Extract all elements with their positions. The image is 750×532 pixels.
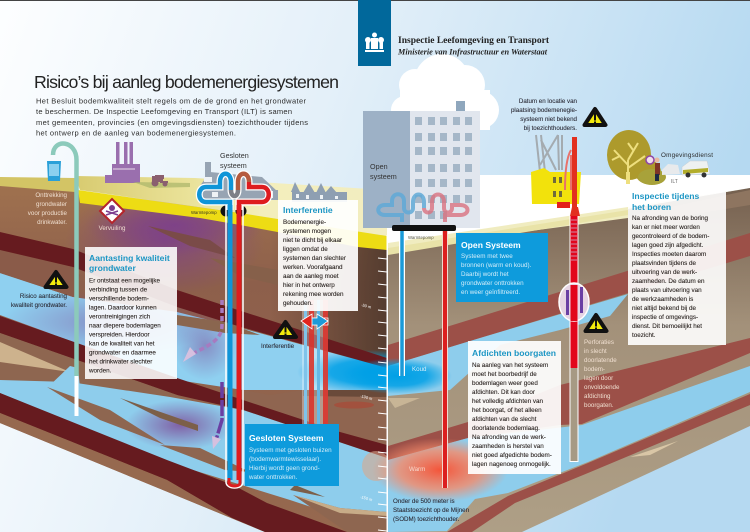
icon: pollution diamond — [100, 199, 124, 223]
panel: inspectie tijdens het boren: lagen goed zijn afgedicht. — [632, 242, 704, 249]
warning: datum en locatie — [584, 109, 606, 125]
interference arrows — [301, 314, 328, 329]
panel: interferentie: systemen mogen — [283, 228, 331, 235]
drilled well column — [570, 216, 578, 462]
brown under water — [243, 390, 387, 445]
panel: interferentie — [278, 200, 358, 311]
panel: gesloten systeem — [245, 424, 339, 486]
perforation detail — [559, 283, 589, 321]
depth labels: -50 m — [361, 302, 373, 310]
panel: aantasting kwaliteit grondwater: worden. — [88, 368, 112, 374]
panel: afdichten boorgaten: het boorgat, of het alleen — [472, 407, 542, 414]
panel: gesloten systeem: Gesloten Systeem — [249, 433, 324, 443]
panel: afdichten boorgaten: bodemlagen weer goed — [472, 380, 538, 387]
panel: inspectie tijdens het boren: niet altijd bekend bij de — [632, 305, 697, 312]
icon: tree — [607, 130, 666, 185]
icon: water glass — [47, 161, 61, 181]
water layer one — [388, 294, 628, 396]
panel: aantasting kwaliteit grondwater: Aantasting kwaliteit — [89, 253, 170, 263]
corner scale — [378, 235, 388, 532]
label: datum en locatie: Datum en locatie van — [519, 98, 578, 105]
panel: afdichten boorgaten: het volledig afdichten van — [472, 398, 544, 405]
heat pump bar — [392, 225, 456, 231]
panel: interferentie: werken. Voorafgaand — [282, 264, 343, 271]
label: datum en locatie: plaatsing bodemenegie- — [511, 107, 577, 114]
organisation name: Inspectie Leefomgeving en Transport — [398, 35, 550, 45]
label: perforaties: onvoldoende — [584, 384, 620, 391]
label: sodm note: Onder de 500 meter is — [393, 498, 455, 505]
icon: inspector with magnifier — [646, 156, 660, 181]
panel: aantasting kwaliteit grondwater: verontreinigingen zich — [89, 314, 151, 320]
panel: aantasting kwaliteit grondwater: lagen. Daardoor kunnen — [89, 304, 157, 312]
maroon band two — [0, 316, 387, 458]
panel: inspectie tijdens het boren — [628, 191, 726, 345]
icon: tractor — [152, 175, 168, 186]
panel: open systeem — [456, 233, 548, 302]
label: datum en locatie: bij toezichthouders. — [524, 125, 577, 132]
label: warmtepomp open: Warmtepomp — [408, 235, 434, 240]
label: ilt: ILT — [671, 179, 678, 185]
icon: house — [197, 162, 278, 200]
intro text: te beschermen. De Inspectie Leefomgeving en Transport (ILT) is samen — [36, 107, 292, 116]
icon: neighbouring houses — [291, 182, 347, 202]
surface field — [75, 176, 387, 236]
dark upper right soil — [270, 225, 387, 360]
label: sodm note: Staatstoezicht op de Mijnen — [393, 507, 470, 514]
panel: aantasting kwaliteit grondwater: naar diepere bodemlagen — [89, 322, 161, 330]
panel: interferentie: Interferentie — [283, 205, 333, 215]
upper water layer — [0, 273, 387, 390]
field — [133, 182, 190, 188]
panel: inspectie tijdens het boren: Inspectie tijdens — [632, 191, 700, 201]
panel: inspectie tijdens het boren: plaats van uitvoering van — [632, 287, 702, 294]
label: perforaties: afdichting — [584, 393, 611, 400]
right soil block — [342, 188, 750, 532]
organisation name: Ministerie van Infrastructuur en Waterstaat — [397, 48, 548, 56]
panel: afdichten boorgaten: zaamheden is herstel van — [472, 443, 544, 450]
label: gesloten systeem: Gesloten — [220, 151, 249, 160]
red layer one — [388, 233, 750, 366]
label: warm: Warm — [409, 466, 425, 473]
panel: inspectie tijdens het boren: inspectie of omgevings- — [632, 314, 698, 321]
panel: open systeem: Systeem met twee — [461, 253, 513, 260]
depth labels: -150 m — [360, 494, 374, 502]
panel: aantasting kwaliteit grondwater: verschillende bodem- — [89, 296, 149, 302]
olive left band — [0, 177, 75, 192]
office building — [363, 101, 480, 228]
panel: interferentie: systemen dan slechter — [283, 255, 346, 262]
panel: afdichten boorgaten: Afdichten boorgaten — [472, 348, 556, 358]
panel: afdichten boorgaten: afdichten van de slecht — [472, 416, 537, 423]
panel: inspectie tijdens het boren: toezicht. — [632, 332, 656, 339]
water layer two — [388, 366, 750, 532]
warning: perforaties — [586, 315, 606, 331]
yellow layer — [78, 190, 387, 250]
lower maroon — [0, 393, 347, 532]
panel: open systeem: grondwater onttrokken — [461, 280, 524, 287]
label: perforaties: in slecht — [584, 348, 607, 355]
panel: gesloten systeem: Systeem met gesloten buizen — [249, 447, 332, 454]
panel: inspectie tijdens het boren: plaatsvinden tijdens de — [632, 260, 697, 267]
label: perforaties: bodem- — [584, 366, 605, 373]
panel: interferentie: rekening mee worden — [283, 291, 344, 298]
panel: open systeem: en weer geïnfiltreerd. — [461, 289, 520, 296]
mid brown and tan — [0, 333, 255, 430]
depth labels — [360, 302, 374, 502]
panel: afdichten boorgaten: doorlatende bodemlaag. — [472, 425, 540, 432]
label: warmtepomp closed: Warmtepomp — [191, 210, 217, 215]
label: vervuiling: Vervuiling — [99, 225, 126, 232]
maroon band one — [0, 232, 387, 368]
panel: inspectie tijdens het boren: zaamheden. De datum en — [632, 278, 705, 285]
intro text: met gemeenten, provincies (en omgevingsdiensten) toezichthouder tijdens — [36, 118, 308, 127]
icon: factory — [105, 142, 140, 183]
label: interferentie: Interferentie — [261, 343, 295, 350]
label: gesloten systeem: systeem — [220, 161, 247, 170]
panel: inspectie tijdens het boren: gecontroleerd of de bodem- — [632, 233, 709, 240]
ground surface white — [387, 175, 750, 250]
panel: afdichten boorgaten: lagen nagenoeg onmogelijk. — [472, 461, 551, 468]
red layer three — [447, 394, 750, 532]
title: Risico’s bij aanleg bodemenergiesystemen — [34, 72, 339, 92]
label: perforaties: doorlatende — [584, 357, 617, 364]
panel: open systeem: Daarbij wordt het — [461, 271, 509, 278]
panel: afdichten boorgaten: Na aanleg van het systeem — [472, 362, 548, 369]
panel: inspectie tijdens het boren: Inspecties moeten daarom — [632, 251, 706, 258]
panel: afdichten boorgaten: moet het boorbedrijf de — [472, 371, 537, 378]
panel: aantasting kwaliteit grondwater: grondwater — [89, 263, 136, 273]
panel: afdichten boorgaten: Na afronding van de werk- — [472, 434, 546, 441]
panel: inspectie tijdens het boren: kan er niet meer worden — [632, 224, 700, 231]
icon: inspection vans — [662, 161, 710, 178]
panel: inspectie tijdens het boren: uitvoering van de werk- — [632, 269, 697, 276]
crest — [365, 32, 384, 52]
panel: aantasting kwaliteit grondwater: grondwater en daarmee — [89, 350, 156, 356]
panel: aantasting kwaliteit grondwater: Er ontstaat een mogelijke — [89, 278, 161, 284]
label: open systeem: Open — [370, 162, 388, 171]
panel: interferentie: aan de aanleg moet — [283, 273, 339, 280]
label: perforaties: lagen door — [584, 375, 613, 382]
label: perforaties: boorgaten. — [584, 402, 614, 409]
panel: inspectie tijdens het boren: het boren — [632, 202, 671, 212]
intro text: Het Besluit bodemkwaliteit stelt regels om de de grond en het grondwater — [36, 96, 307, 106]
warning: interferentie — [275, 322, 296, 337]
drinking water well pipe — [53, 144, 76, 416]
closed system pipes — [199, 174, 269, 488]
panel: aantasting kwaliteit grondwater: het drinkwater slechter — [89, 358, 152, 366]
cream surface edge — [388, 188, 750, 250]
label: open systeem: systeem — [370, 172, 397, 181]
open system pipes — [378, 194, 468, 488]
panel: afdichten boorgaten: afdichten. Dit kan door — [472, 389, 535, 396]
purple contamination arrows — [183, 300, 222, 449]
panel: inspectie tijdens het boren: Na afronding van de boring — [632, 215, 708, 222]
label: onttrekking: voor productie — [28, 210, 68, 217]
label: onttrekking: drinkwater. — [37, 219, 67, 226]
organisation name — [397, 35, 550, 56]
panel: interferentie: Bodemenergie- — [283, 219, 326, 226]
panel: afdichten boorgaten: niet goed afgedichte bodem- — [472, 452, 552, 459]
purple contamination — [65, 185, 265, 295]
label: risico: Risico aantasting — [20, 293, 68, 300]
panel: afdichten boorgaten — [468, 341, 561, 474]
panel: aantasting kwaliteit grondwater — [85, 247, 177, 379]
depth labels: -100 m — [360, 393, 374, 401]
intro text: het ontwerp en de aanleg van bodemenergiesystemen. — [36, 128, 236, 138]
panel: interferentie: gehouden. — [283, 300, 313, 307]
label: koud: Koud — [412, 366, 427, 373]
heat pump — [220, 206, 246, 216]
panel: aantasting kwaliteit grondwater: verbinding tussen de — [89, 286, 148, 294]
brown strata — [148, 226, 235, 258]
label: onttrekking: Onttrekking — [35, 192, 68, 199]
label: perforaties: Perforaties — [584, 339, 614, 346]
panel: interferentie: hier in het ontwerp — [283, 282, 335, 289]
panel: inspectie tijdens het boren: dienst. Dit bemoeilijkt het — [632, 323, 702, 330]
panel: open systeem: bronnen (warm en koud). — [461, 262, 532, 269]
panel: aantasting kwaliteit grondwater: kan de kwaliteit van het — [89, 340, 155, 348]
label: omgevingsdienst: Omgevingsdienst — [661, 152, 713, 159]
cloud — [391, 54, 499, 130]
panel: interferentie: liggen omdat de — [283, 246, 328, 253]
label: risico: kwaliteit grondwater. — [11, 302, 67, 309]
label: datum en locatie: systeem niet bekend — [520, 116, 578, 123]
panel: open systeem: Open Systeem — [461, 240, 521, 250]
interference pipes — [302, 300, 328, 425]
panel: gesloten systeem: (bodemwarmtewisselaar). — [249, 456, 321, 463]
warning: grondwater — [46, 272, 66, 287]
red layer two — [388, 338, 750, 460]
panel: aantasting kwaliteit grondwater: verspreiden. Hierdoor — [89, 332, 150, 338]
logo — [358, 0, 391, 66]
lower water layer — [0, 380, 387, 532]
panel: inspectie tijdens het boren: de werkzaamheden is — [632, 296, 693, 303]
panel: interferentie: niet te dicht bij elkaar — [283, 237, 342, 244]
left soil block — [0, 176, 447, 532]
label: sodm note: (SODM) toezichthouder. — [393, 516, 460, 523]
panel: gesloten systeem: water onttrokken. — [248, 474, 298, 481]
panel: gesloten systeem: Hierbij wordt geen grond- — [249, 465, 320, 472]
label: onttrekking: grondwater — [36, 201, 67, 208]
icon: drilling rig and yellow building — [531, 135, 581, 216]
